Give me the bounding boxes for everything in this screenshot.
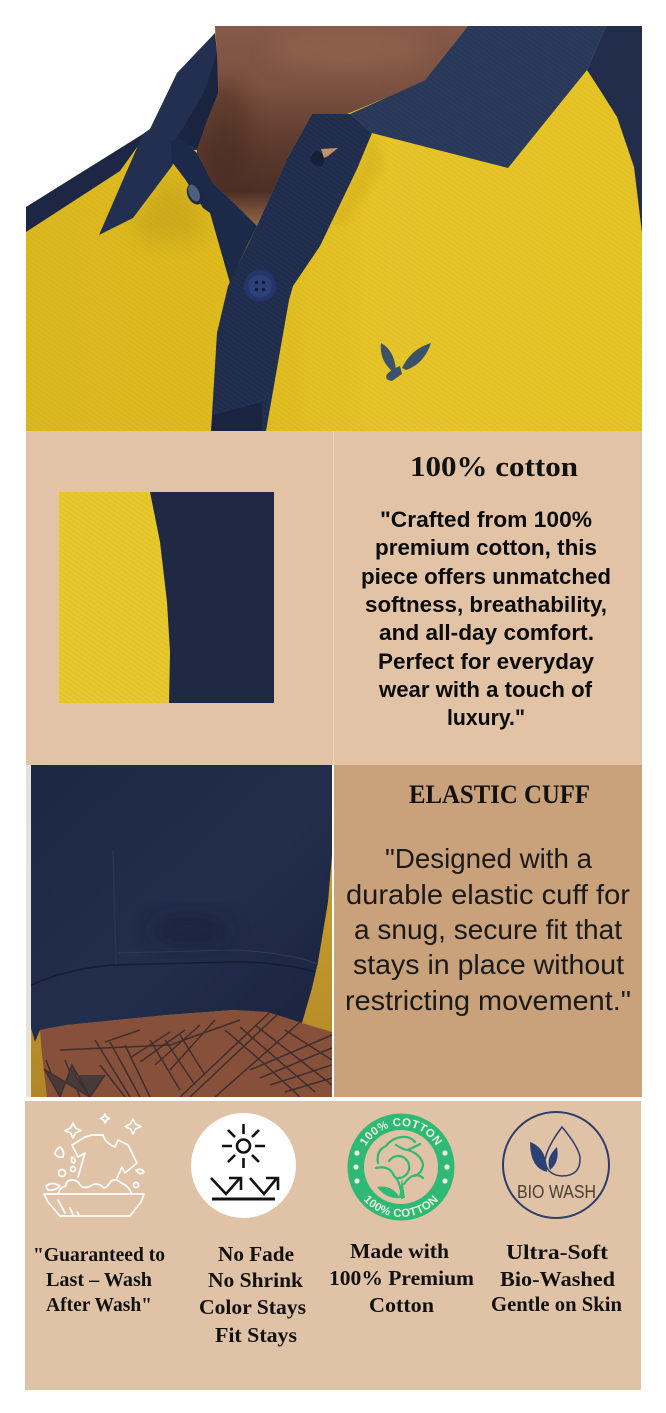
- panel: care and quality badges: [25, 1101, 641, 1390]
- label: wash guarantee: "Guaranteed to: [33, 1244, 165, 1266]
- text block: cuff description: [345, 843, 631, 1016]
- text block: cotton description: softness, breathability,: [365, 592, 607, 617]
- heading: elastic cuff: ELASTIC CUFF: [409, 780, 590, 809]
- text block: cotton description: Perfect for everyday: [378, 649, 595, 674]
- label: premium cotton: [329, 1239, 475, 1317]
- icon: 100% cotton seal: 100% COTTON: [360, 1118, 442, 1146]
- label: premium cotton: 100% Premium: [329, 1266, 475, 1290]
- text block: cuff description: restricting movement.": [345, 985, 631, 1016]
- label: wash guarantee: Last – Wash: [46, 1269, 152, 1291]
- icon: washing basin: [44, 1114, 144, 1216]
- label: bio washed: Gentle on Skin: [491, 1292, 622, 1316]
- icon: collar button: [186, 184, 200, 204]
- hero photo: polo shirt collar and placket: [26, 26, 642, 431]
- label: bio washed: [491, 1240, 622, 1316]
- heading: 100% cotton: 100% cotton: [410, 451, 578, 483]
- text block: cotton description: and all-day comfort.: [379, 620, 594, 645]
- icon: bio wash: [503, 1112, 609, 1218]
- icon: placket button: [244, 270, 276, 302]
- label: wash guarantee: After Wash": [46, 1294, 152, 1316]
- label: bio washed: Ultra-Soft: [506, 1240, 608, 1264]
- icon: bird logo on chest: [381, 343, 431, 381]
- icon: 100% cotton seal: [348, 1114, 454, 1220]
- text block: cotton description: wear with a touch of: [378, 677, 593, 702]
- text block: cuff description: "Designed with a: [385, 843, 592, 874]
- text block: cotton description: [361, 507, 611, 730]
- panel: 100% cotton: [26, 431, 642, 765]
- neck skin: [197, 26, 468, 226]
- label: wash guarantee: [33, 1244, 165, 1316]
- text block: cuff description: durable elastic cuff for: [346, 879, 630, 910]
- icon: no fade no shrink: [191, 1113, 296, 1218]
- icon: 100% cotton seal: 100% COTTON: [364, 1195, 438, 1217]
- panel: elastic cuff: [334, 765, 642, 1097]
- text block: cuff description: stays in place without: [353, 949, 624, 980]
- fabric swatch photo: [59, 492, 274, 703]
- label: no fade no shrink: [199, 1242, 306, 1347]
- label: no fade no shrink: Color Stays: [199, 1295, 306, 1319]
- label: no fade no shrink: Fit Stays: [215, 1323, 297, 1347]
- text block: cuff description: a snug, secure fit that: [354, 914, 622, 945]
- photo: sleeve with elastic cuff: [26, 765, 332, 1097]
- label: premium cotton: Cotton: [369, 1293, 434, 1317]
- label: bio washed: Bio-Washed: [500, 1267, 615, 1291]
- label: premium cotton: Made with: [350, 1239, 449, 1263]
- text block: cotton description: luxury.": [447, 705, 525, 730]
- text block: cotton description: premium cotton, this: [375, 535, 597, 560]
- label: no fade no shrink: No Shrink: [208, 1268, 303, 1292]
- text block: cotton description: piece offers unmatched: [361, 564, 611, 589]
- label: no fade no shrink: No Fade: [218, 1242, 294, 1266]
- icon: bio wash: BIO WASH: [517, 1182, 596, 1202]
- text block: cotton description: "Crafted from 100%: [380, 507, 592, 532]
